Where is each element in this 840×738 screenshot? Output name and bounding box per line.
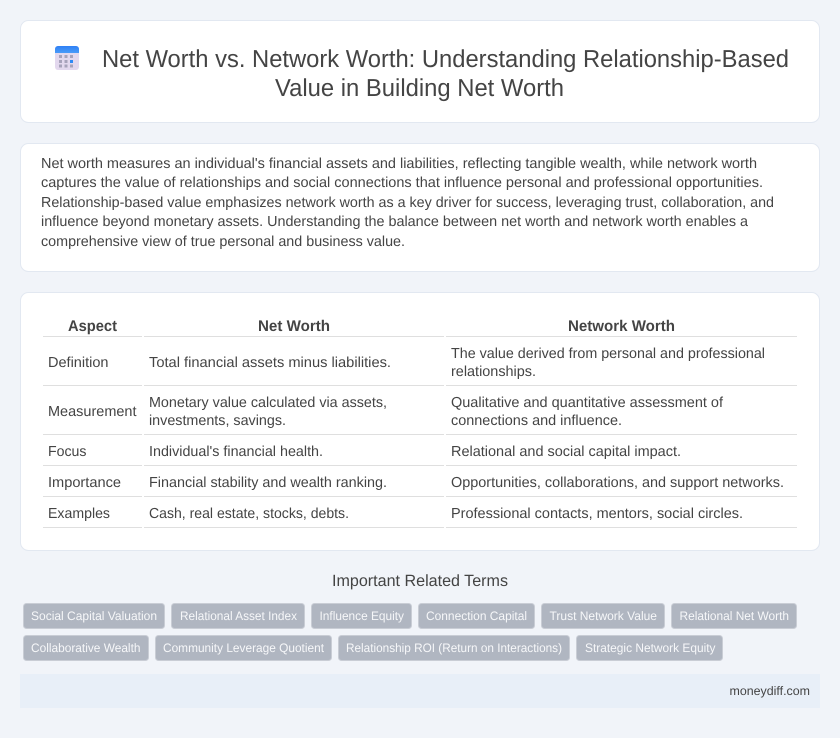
table row: definition <box>48 346 765 380</box>
table row: importance: Opportunities, collaborations, and support networks. <box>451 475 784 491</box>
tag list: related terms <box>24 604 796 660</box>
table header row: Net Worth <box>258 318 330 335</box>
table header row <box>68 318 675 335</box>
tag list: related terms: Trust Network Value <box>550 609 657 623</box>
title: Value in Building Net Worth <box>275 75 564 102</box>
tag list: related terms: Social Capital Valuation <box>31 609 157 623</box>
panel: introduction text <box>20 144 820 272</box>
table header row: Network Worth <box>568 318 675 335</box>
table row: definition: Total financial assets minus liabilities. <box>149 355 391 371</box>
text block: introduction: comprehensive view of true personal and business value. <box>41 234 405 250</box>
table row: examples: Professional contacts, mentors, social circles. <box>451 506 743 522</box>
table row: measurement: Monetary value calculated via assets, <box>149 395 387 411</box>
tag list: related terms: Influence Equity <box>320 609 405 623</box>
tag list: related terms: Relationship ROI (Return on Interactions) <box>346 641 562 655</box>
table row: examples <box>48 506 743 522</box>
table row: examples: Cash, real estate, stocks, debts. <box>149 506 349 522</box>
tag list: related terms: Relational Asset Index <box>180 609 298 623</box>
table row: measurement: Measurement <box>48 404 136 420</box>
table row: definition: relationships. <box>451 364 536 380</box>
table row: focus: Focus <box>48 444 86 460</box>
panel: comparison table <box>20 292 820 550</box>
table row: importance: Importance <box>48 475 121 491</box>
table row: importance <box>48 475 784 491</box>
text block: introduction <box>41 156 774 250</box>
table row: focus: Relational and social capital impact. <box>451 444 681 460</box>
tag list: related terms: Relational Net Worth <box>680 609 789 623</box>
footer <box>20 674 820 708</box>
table row: measurement: Qualitative and quantitative assessment of <box>451 395 724 411</box>
footer: moneydiff.com <box>730 684 810 698</box>
table row: measurement <box>48 395 724 429</box>
table row: focus <box>48 444 681 460</box>
tag list: related terms: Collaborative Wealth <box>31 641 141 655</box>
table row: measurement: investments, savings. <box>149 413 286 429</box>
table row: examples: Examples <box>48 506 110 522</box>
text block: introduction: captures the value of relationships and social connections that influence personal and professional opportunities. <box>41 175 763 191</box>
title <box>102 46 789 102</box>
heading: important related terms: Important Related Terms <box>332 572 508 590</box>
title: Net Worth vs. Network Worth: Understanding Relationship-Based <box>102 46 789 73</box>
table header row: Aspect <box>68 318 117 335</box>
tag list: related terms: Strategic Network Equity <box>585 641 716 655</box>
tag list: related terms: Community Leverage Quotient <box>163 641 325 655</box>
text block: introduction: influence beyond monetary assets. Understanding the balance between net worth and network worth enables a <box>41 214 749 230</box>
tag list: related terms: Connection Capital <box>426 609 527 623</box>
table row: importance: Financial stability and wealth ranking. <box>149 475 387 491</box>
table row: measurement: connections and influence. <box>451 413 622 429</box>
table row: focus: Individual's financial health. <box>149 444 323 460</box>
text block: introduction: Relationship-based value emphasizes network worth as a key driver for success, leveraging trust, collaboration, and <box>41 195 774 211</box>
icon: calendar <box>55 46 79 70</box>
table row: definition: The value derived from personal and professional <box>451 346 765 362</box>
table row: definition: Definition <box>48 355 108 371</box>
panel: title header <box>20 20 820 122</box>
text block: introduction: Net worth measures an individual's financial assets and liabilities, reflecting tangible wealth, while network worth <box>41 156 757 172</box>
